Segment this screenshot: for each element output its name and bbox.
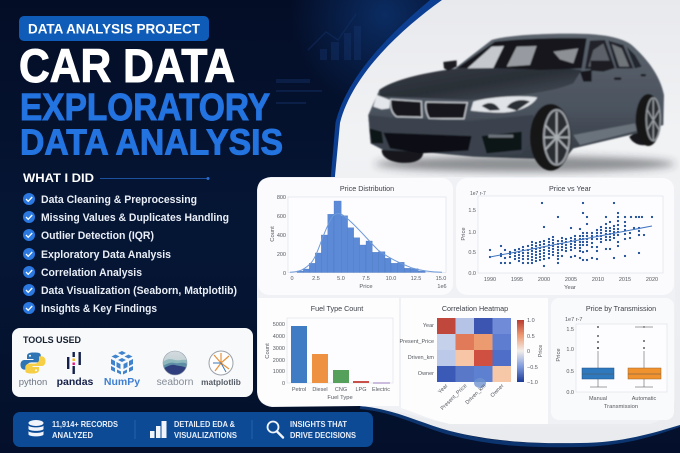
chart: fuel type count bars: 3000 bbox=[273, 346, 285, 352]
car photo illustration bbox=[368, 34, 675, 172]
chart: price distribution histogram: 15.0 bbox=[436, 276, 446, 282]
chart: price distribution histogram: 10.0 bbox=[386, 276, 396, 282]
chart: correlation heatmap: Driven_km bbox=[408, 355, 434, 361]
chart: price distribution histogram: Price bbox=[359, 284, 373, 290]
panel: charts board bbox=[257, 177, 675, 424]
chart: price by transmission boxplot: Automatic bbox=[632, 396, 656, 402]
chart: price distribution histogram: 800 bbox=[277, 195, 286, 201]
faint background chart decoration bbox=[276, 14, 361, 104]
stat: eda: VISUALIZATIONS bbox=[174, 430, 237, 440]
chart: correlation heatmap: Present_Price bbox=[399, 339, 434, 345]
stat: records: 11,914+ RECORDS bbox=[52, 419, 118, 429]
list heading bbox=[23, 171, 210, 185]
chart: price distribution histogram: 0 bbox=[290, 276, 294, 282]
chart: price by transmission boxplot: 0.0 bbox=[566, 390, 574, 396]
car ground shadow bbox=[375, 156, 675, 172]
chart: price distribution histogram: 600 bbox=[277, 214, 286, 220]
chart: fuel type count bars: 0 bbox=[282, 381, 285, 387]
chart: fuel type count bars: Electric bbox=[372, 387, 390, 393]
chart: correlation heatmap: Price bbox=[538, 345, 544, 357]
what i did list bbox=[23, 171, 237, 315]
chart: fuel type count bars: LPG bbox=[355, 387, 367, 393]
chart: correlation heatmap: −1.0 bbox=[527, 380, 538, 386]
chart: price by transmission boxplot: 0.5 bbox=[566, 369, 574, 375]
chart: correlation heatmap bbox=[399, 304, 544, 412]
chart: price vs year scatter: 0.0 bbox=[468, 271, 476, 277]
icon: matplotlib: matplotlib bbox=[201, 377, 241, 387]
stat: records: ANALYZED bbox=[52, 430, 93, 440]
panel: tools used bbox=[12, 328, 253, 397]
subtitle: data analysis: DATA ANALYSIS bbox=[20, 122, 283, 162]
chart: price vs year scatter: 1995 bbox=[511, 277, 523, 283]
chart: price vs year scatter: 2015 bbox=[619, 277, 631, 283]
light studio backdrop with blue curved edge bbox=[335, 0, 680, 445]
chart: correlation heatmap: Owner bbox=[418, 371, 434, 377]
chart: price distribution histogram: 2.5 bbox=[312, 276, 320, 282]
chart: correlation heatmap: Driven_km bbox=[465, 383, 488, 406]
tools heading: TOOLS USED bbox=[23, 335, 81, 346]
list item 1: Data Cleaning & Preprocessing bbox=[41, 194, 197, 206]
icon: numpy bbox=[104, 351, 140, 388]
icon: pandas: pandas bbox=[57, 376, 94, 388]
chart: fuel type count bars bbox=[265, 304, 393, 401]
stat: insights: INSIGHTS THAT bbox=[290, 419, 348, 429]
chart: price vs year scatter: Price bbox=[461, 227, 467, 241]
chart: fuel type count bars: 1000 bbox=[273, 369, 285, 375]
list item 3: Outlier Detection (IQR) bbox=[41, 230, 154, 242]
chart: price distribution histogram: 5.0 bbox=[337, 276, 345, 282]
chart: fuel type count bars: 5000 bbox=[273, 322, 285, 328]
subtitle: exploratory: EXPLORATORY bbox=[20, 87, 270, 129]
list item 7: Insights & Key Findings bbox=[41, 303, 157, 315]
chart: correlation heatmap: 0.5 bbox=[527, 334, 535, 340]
chart: price by transmission boxplot bbox=[556, 304, 667, 410]
chart: price vs year scatter bbox=[461, 184, 663, 291]
icon: python bbox=[19, 352, 47, 388]
badge: data analysis project bbox=[19, 16, 209, 41]
icon: seaborn: seaborn bbox=[157, 377, 193, 388]
chart: price vs year scatter: 2020 bbox=[646, 277, 658, 283]
chart: price distribution histogram: 1e6 bbox=[437, 284, 447, 290]
chart: correlation heatmap: Year bbox=[437, 383, 450, 395]
stat: eda: DETAILED EDA & bbox=[174, 419, 235, 429]
icon: matplotlib bbox=[201, 351, 241, 387]
chart: price distribution histogram: 0 bbox=[283, 271, 286, 277]
chart: price distribution histogram bbox=[270, 184, 447, 290]
panel: stats bar bbox=[13, 412, 373, 447]
chart: price by transmission boxplot: 1.5 bbox=[566, 327, 574, 333]
sedan bbox=[368, 34, 664, 171]
badge: data analysis project: DATA ANALYSIS PROJECT bbox=[28, 22, 201, 36]
chart: price vs year scatter: 1.5 bbox=[468, 208, 476, 214]
chart: price by transmission boxplot: Transmission bbox=[604, 404, 638, 410]
chart: price by transmission boxplot: 1.0 bbox=[566, 347, 574, 353]
chart: price vs year scatter: 1.0 bbox=[468, 230, 476, 236]
chart: price by transmission boxplot: 1e7 r-7 bbox=[565, 317, 582, 323]
chart: fuel type count bars: CNG bbox=[335, 387, 347, 393]
chart: price vs year scatter: 1e7 r-7 bbox=[470, 191, 486, 197]
chart: price vs year scatter: Price vs Year bbox=[549, 184, 592, 193]
list heading: WHAT I DID bbox=[23, 171, 94, 185]
chart: price vs year scatter: 0.5 bbox=[468, 250, 476, 256]
chart: fuel type count bars: Fuel Type bbox=[327, 395, 353, 401]
stat: insights bbox=[268, 419, 356, 440]
title: car data: CAR DATA bbox=[19, 40, 235, 93]
chart: price by transmission boxplot: Price bbox=[556, 348, 562, 362]
chart: price distribution histogram: 7.5 bbox=[362, 276, 370, 282]
stat: eda bbox=[150, 419, 237, 440]
chart: fuel type count bars: Fuel Type Count bbox=[311, 304, 363, 313]
chart: price distribution histogram: 12.5 bbox=[411, 276, 421, 282]
chart: correlation heatmap: 1.0 bbox=[527, 318, 535, 324]
stat: records bbox=[28, 419, 118, 440]
chart: price vs year scatter: 2010 bbox=[592, 277, 604, 283]
chart: price vs year scatter: 1990 bbox=[484, 277, 496, 283]
chart: price vs year scatter: 2000 bbox=[538, 277, 550, 283]
chart: price vs year scatter: 2005 bbox=[565, 277, 577, 283]
chart: price distribution histogram: Price Distribution bbox=[340, 184, 394, 193]
list item 6: Data Visualization (Seaborn, Matplotlib) bbox=[41, 285, 237, 297]
icon: seaborn bbox=[157, 351, 193, 388]
icon: pandas bbox=[57, 352, 94, 388]
list item 4: Exploratory Data Analysis bbox=[41, 249, 171, 261]
icon: python: python bbox=[19, 377, 47, 388]
chart: fuel type count bars: 2000 bbox=[273, 358, 285, 364]
chart: correlation heatmap: 0 bbox=[527, 349, 530, 355]
chart: fuel type count bars: 4000 bbox=[273, 334, 285, 340]
chart: price distribution histogram: 400 bbox=[277, 233, 286, 239]
chart: fuel type count bars: Petrol bbox=[292, 387, 306, 393]
chart: correlation heatmap: Year bbox=[423, 323, 434, 329]
chart: price by transmission boxplot: Manual bbox=[589, 396, 607, 402]
chart: price vs year scatter: Year bbox=[564, 285, 576, 291]
chart: correlation heatmap: Correlation Heatmap bbox=[442, 304, 508, 313]
chart: price distribution histogram: 200 bbox=[277, 252, 286, 258]
chart: fuel type count bars: Diesel bbox=[312, 387, 328, 393]
chart: correlation heatmap: Owner bbox=[490, 383, 506, 399]
stat: insights: DRIVE DECISIONS bbox=[290, 430, 356, 440]
icon: numpy: NumPy bbox=[104, 376, 140, 388]
chart: correlation heatmap: −0.5 bbox=[527, 365, 538, 371]
list item 2: Missing Values & Duplicates Handling bbox=[41, 212, 229, 224]
chart: price distribution histogram: Count bbox=[270, 226, 276, 242]
list item 5: Correlation Analysis bbox=[41, 267, 142, 279]
chart: correlation heatmap: Present_Price bbox=[440, 383, 468, 412]
chart: fuel type count bars: Count bbox=[265, 343, 271, 359]
chart: price by transmission boxplot: Price by Transmission bbox=[586, 304, 656, 313]
